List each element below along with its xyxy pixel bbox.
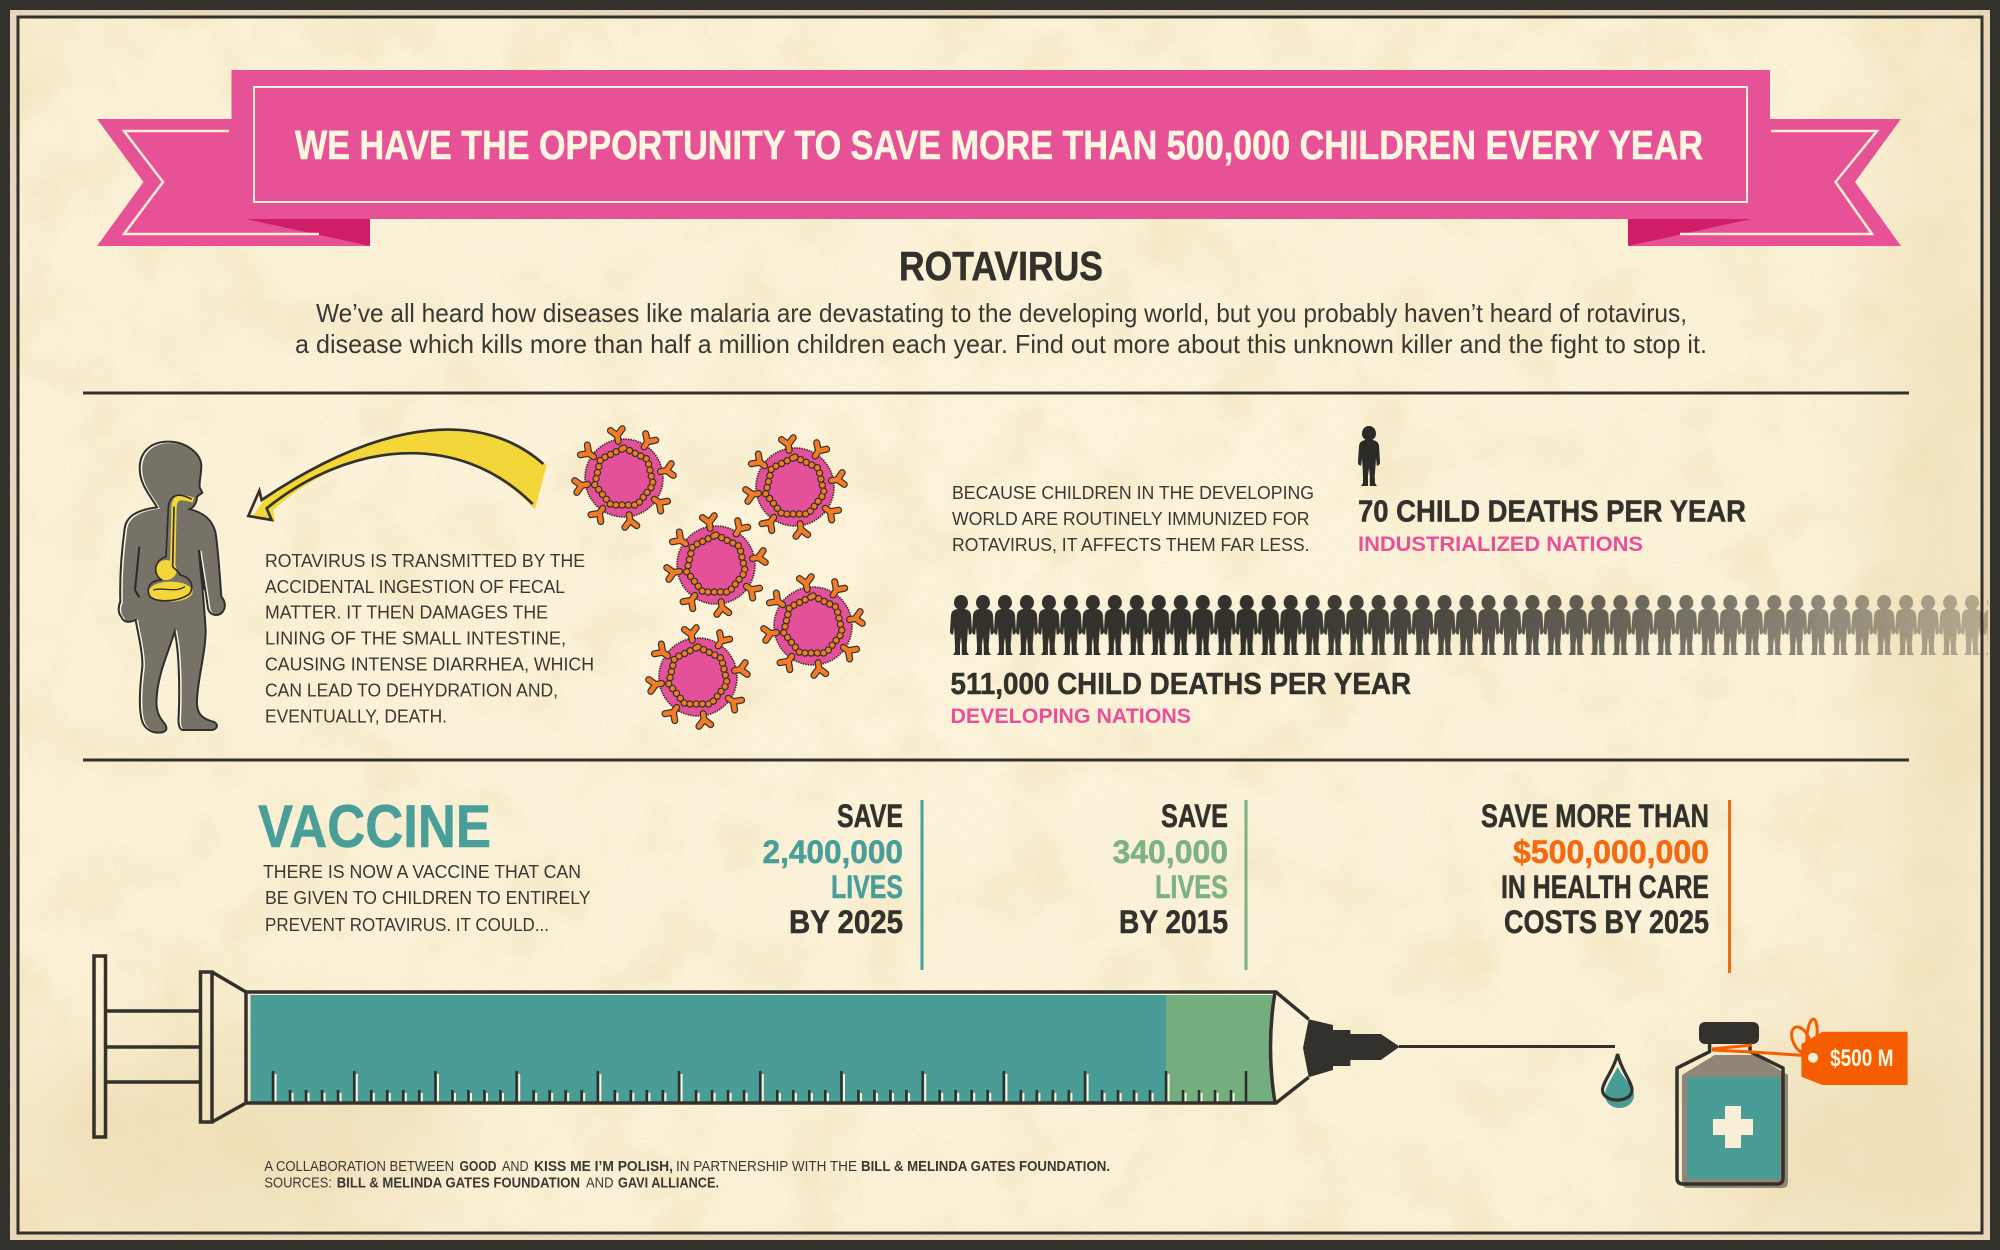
- footer credits: KISS ME I’M POLISH,: [534, 1158, 673, 1175]
- text: transmission: CAN LEAD TO DEHYDRATION AND,: [265, 680, 558, 700]
- text: vaccine description: BE GIVEN TO CHILDREN TO ENTIRELY: [265, 887, 590, 908]
- stat: 340,000 lives: SAVE: [1161, 798, 1228, 834]
- footer credits: BILL & MELINDA GATES FOUNDATION: [337, 1175, 580, 1192]
- chart: row of children: [950, 595, 1988, 655]
- text: vaccine description: PREVENT ROTAVIRUS. IT COULD...: [265, 914, 549, 935]
- intro text: We’ve all heard how diseases like malaria are devastating to the developing world, but you probably haven’t heard of rotavirus,: [316, 298, 1687, 328]
- stat: health care costs: SAVE MORE THAN: [1481, 798, 1709, 834]
- stat: health care costs: $500,000,000: [1513, 834, 1709, 870]
- title: WE HAVE THE OPPORTUNITY TO SAVE MORE THAN 500,000 CHILDREN EVERY YEAR: [295, 122, 1703, 168]
- stat: 340,000 lives: BY 2015: [1119, 904, 1228, 940]
- footer credits: SOURCES:: [264, 1175, 332, 1192]
- icon: vaccine bottle: [1677, 1022, 1788, 1188]
- text: transmission: LINING OF THE SMALL INTESTINE,: [265, 628, 566, 648]
- text: transmission: MATTER. IT THEN DAMAGES THE: [265, 602, 548, 622]
- footer credits: GAVI ALLIANCE.: [618, 1175, 719, 1192]
- icons: rotavirus particles: [575, 429, 862, 727]
- price tag: $500 M: [1830, 1045, 1894, 1072]
- stat: health care costs: COSTS BY 2025: [1504, 904, 1709, 940]
- text: immunized note: [952, 482, 1314, 555]
- stat: 340,000 lives: LIVES: [1155, 869, 1228, 905]
- footer credits: AND: [502, 1158, 529, 1175]
- banner: [97, 70, 1901, 246]
- text: transmission: ACCIDENTAL INGESTION OF FECAL: [265, 576, 565, 597]
- stat: 2,400,000 lives: LIVES: [831, 869, 903, 905]
- text: immunized note: BECAUSE CHILDREN IN THE DEVELOPING: [952, 482, 1314, 503]
- syringe: [94, 956, 1615, 1137]
- stat: 70 deaths: 70 CHILD DEATHS PER YEAR: [1358, 494, 1746, 529]
- stat: 340,000 lives: 340,000: [1112, 834, 1228, 870]
- text: vaccine description: THERE IS NOW A VACCINE THAT CAN: [263, 861, 581, 882]
- heading: rotavirus: ROTAVIRUS: [899, 243, 1103, 289]
- stat: 2,400,000 lives: 2,400,000: [762, 834, 903, 870]
- text: immunized note: ROTAVIRUS, IT AFFECTS THEM FAR LESS.: [952, 534, 1310, 555]
- icon: child with digestive tract: [119, 442, 227, 733]
- price tag: [1712, 1019, 1908, 1085]
- stat: 2,400,000 lives: [762, 798, 924, 970]
- stat: 70 deaths: INDUSTRIALIZED NATIONS: [1358, 533, 1643, 556]
- heading: vaccine: VACCINE: [258, 793, 491, 860]
- text: immunized note: WORLD ARE ROUTINELY IMMUNIZED FOR: [952, 508, 1310, 529]
- footer credits: IN PARTNERSHIP WITH THE: [676, 1158, 857, 1175]
- footer credits: [264, 1158, 1110, 1192]
- stat: 511,000 deaths: DEVELOPING NATIONS: [950, 705, 1191, 728]
- text: transmission: ROTAVIRUS IS TRANSMITTED BY THE: [265, 550, 585, 571]
- intro text: a disease which kills more than half a million children each year. Find out more about this unknown killer and the fight to stop it.: [295, 329, 1707, 359]
- text: transmission: [265, 550, 594, 726]
- stat: 511,000 deaths: 511,000 CHILD DEATHS PER YEAR: [950, 666, 1411, 701]
- stat: 70 deaths: [1358, 494, 1746, 556]
- stat: 2,400,000 lives: BY 2025: [789, 904, 903, 940]
- icon: vaccine drop: [1602, 1054, 1634, 1108]
- stat: 511,000 deaths: [950, 666, 1411, 728]
- text: transmission: EVENTUALLY, DEATH.: [265, 706, 447, 726]
- footer credits: GOOD: [460, 1158, 497, 1175]
- text: vaccine description: [263, 861, 590, 935]
- footer credits: BILL & MELINDA GATES FOUNDATION.: [861, 1158, 1110, 1175]
- icon: single child: [1358, 426, 1380, 486]
- intro text: [295, 298, 1707, 359]
- stat: 2,400,000 lives: SAVE: [837, 798, 903, 834]
- text: transmission: CAUSING INTENSE DIARRHEA, WHICH: [265, 654, 594, 674]
- footer credits: AND: [586, 1175, 614, 1192]
- footer credits: A COLLABORATION BETWEEN: [264, 1158, 454, 1175]
- stat: 340,000 lives: [1112, 798, 1248, 970]
- arrow: yellow curved arrow: [248, 430, 547, 522]
- stat: health care costs: [1481, 798, 1731, 973]
- stat: health care costs: IN HEALTH CARE: [1501, 869, 1709, 905]
